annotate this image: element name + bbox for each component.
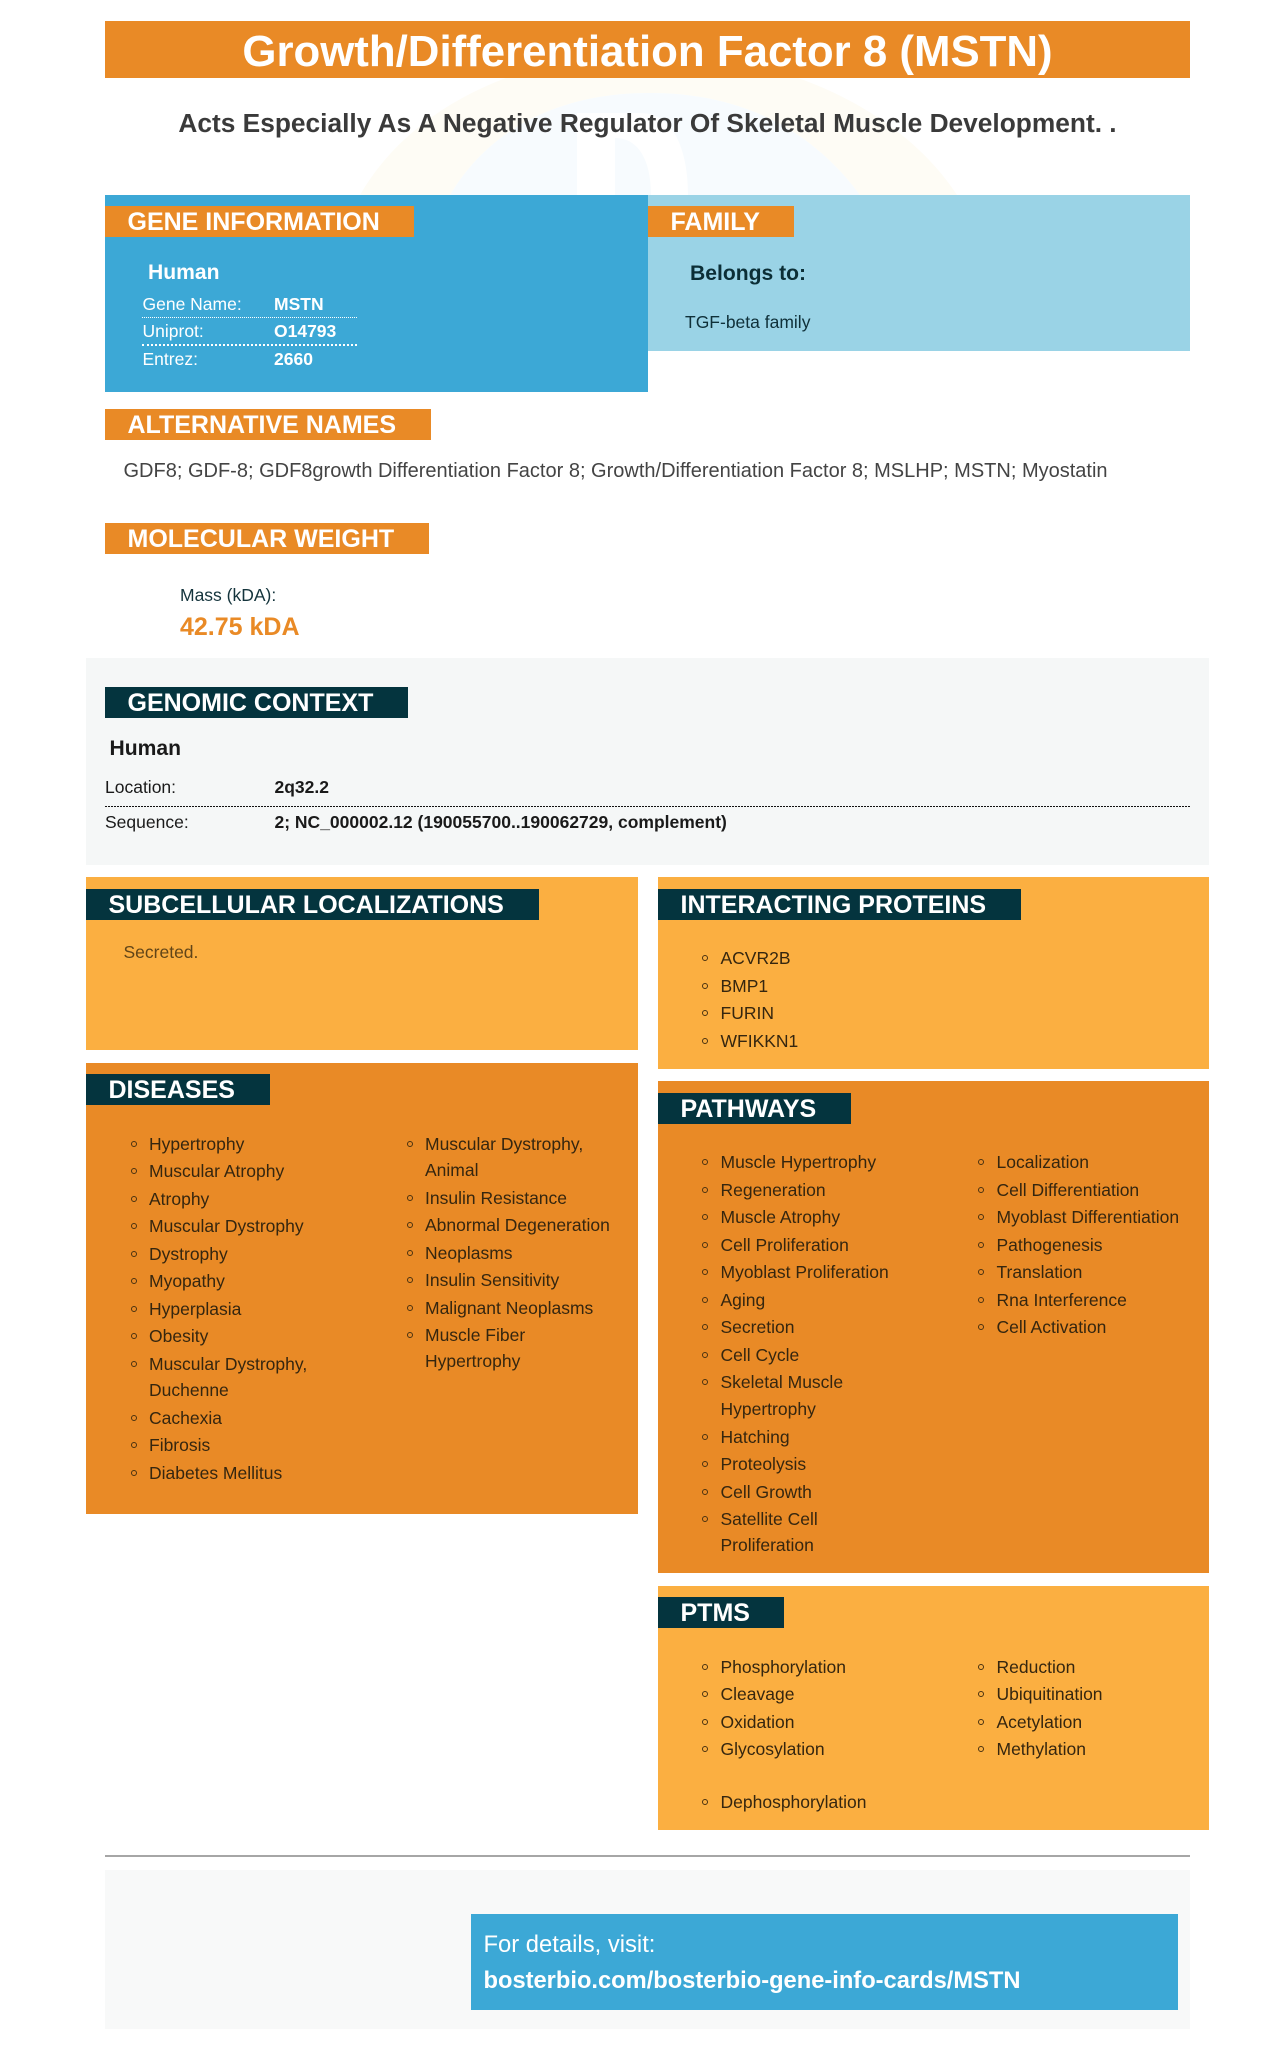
diseases list column 1: Hypertrophy xyxy=(149,1134,244,1154)
pathways list column 1 xyxy=(702,1152,889,1555)
pathways list column 1: Myoblast Proliferation xyxy=(720,1262,889,1282)
diseases list column 1: Obesity xyxy=(149,1326,208,1346)
diseases list column 2: Muscle Fiber xyxy=(425,1325,525,1345)
panel: subcellular localizations xyxy=(86,877,638,1050)
pathways list column 2: Myoblast Differentiation xyxy=(996,1207,1179,1227)
alternative names text: GDF8; GDF-8; GDF8growth Differentiation Factor 8; Growth/Differentiation Factor 8; MSLHP; MSTN; Myostatin xyxy=(124,460,1108,482)
ptms list column 2 xyxy=(978,1657,1103,1759)
heading: alternative names: ALTERNATIVE NAMES xyxy=(128,411,396,439)
diseases list column 2: Hypertrophy xyxy=(425,1351,520,1371)
ptms list column 2: Methylation xyxy=(996,1739,1086,1759)
pathways list column 1: Hypertrophy xyxy=(720,1399,816,1419)
diseases list column 1: Muscular Dystrophy xyxy=(149,1216,304,1236)
entrez row: Entrez: xyxy=(142,349,198,369)
pathways list column 2: Translation xyxy=(996,1262,1082,1282)
ptms list column 1: Phosphorylation xyxy=(720,1657,846,1677)
gene name row xyxy=(142,294,324,314)
panel: gene information xyxy=(105,195,648,392)
diseases list column 2: Abnormal Degeneration xyxy=(425,1215,610,1235)
diseases list column 1: Hyperplasia xyxy=(149,1299,241,1319)
pathways list column 1: Skeletal Muscle xyxy=(720,1372,843,1392)
species label: Human xyxy=(148,261,220,284)
title banner: Growth/Differentiation Factor 8 (MSTN) xyxy=(242,27,1053,76)
heading: ptms xyxy=(658,1597,784,1628)
ptms list column 2: Acetylation xyxy=(996,1712,1082,1732)
panel: family xyxy=(648,195,1190,351)
diseases list column 1: Diabetes Mellitus xyxy=(149,1463,282,1483)
subtitle: Acts Especially As A Negative Regulator Of Skeletal Muscle Development. . xyxy=(178,108,1117,138)
panel: diseases xyxy=(86,1063,638,1514)
entrez row: 2660 xyxy=(274,349,313,369)
diseases list column 2 xyxy=(407,1134,610,1371)
title banner xyxy=(105,21,1190,78)
gene name row: MSTN xyxy=(274,294,324,314)
location row: Location: xyxy=(105,777,176,797)
heading: molecular weight: MOLECULAR WEIGHT xyxy=(128,525,394,553)
heading: pathways: PATHWAYS xyxy=(680,1095,816,1123)
heading: ptms: PTMS xyxy=(680,1599,750,1627)
diseases list column 2: Insulin Resistance xyxy=(425,1188,567,1208)
interacting proteins list: ACVR2B xyxy=(720,948,791,968)
watermark logo xyxy=(360,78,956,195)
diseases list column 1: Myopathy xyxy=(149,1271,225,1291)
pathways list column 2: Rna Interference xyxy=(996,1290,1127,1310)
uniprot row: O14793 xyxy=(274,321,336,341)
diseases list column 2: Muscular Dystrophy, xyxy=(425,1134,583,1154)
family value: TGF-beta family xyxy=(685,312,810,332)
ptms list column 2: Ubiquitination xyxy=(996,1684,1103,1704)
pathways list column 1: Muscle Atrophy xyxy=(720,1207,840,1227)
pathways list column 1: Proliferation xyxy=(720,1535,814,1555)
heading: genomic context: GENOMIC CONTEXT xyxy=(128,689,373,717)
species label: Human xyxy=(110,737,181,760)
heading: diseases: DISEASES xyxy=(108,1076,235,1104)
ptms list column 1: Dephosphorylation xyxy=(720,1792,866,1812)
pathways list column 2 xyxy=(978,1152,1179,1337)
heading: diseases xyxy=(86,1074,270,1105)
heading: gene information: GENE INFORMATION xyxy=(128,208,380,236)
heading: interacting proteins: INTERACTING PROTEINS xyxy=(680,891,986,919)
gene name row: Gene Name: xyxy=(142,294,242,314)
pathways list column 2: Localization xyxy=(996,1152,1089,1172)
pathways list column 1: Muscle Hypertrophy xyxy=(720,1152,876,1172)
ptms list column 1: Cleavage xyxy=(720,1684,794,1704)
interacting proteins list: FURIN xyxy=(720,1003,774,1023)
pathways list column 1: Proteolysis xyxy=(720,1454,806,1474)
sequence row: 2; NC_000002.12 (190055700..190062729, complement) xyxy=(274,812,727,832)
heading: pathways xyxy=(658,1093,851,1124)
diseases list column 2: Malignant Neoplasms xyxy=(425,1298,593,1318)
diseases list column 1: Fibrosis xyxy=(149,1435,210,1455)
panel: footer xyxy=(105,1870,1190,2029)
diseases list column 1: Dystrophy xyxy=(149,1244,228,1264)
diseases list column 1 xyxy=(131,1134,307,1483)
pathways list column 1: Cell Cycle xyxy=(720,1345,799,1365)
callout url: bosterbio.com/bosterbio-gene-info-cards/MSTN xyxy=(484,1968,1020,1994)
pathways list column 2: Cell Differentiation xyxy=(996,1180,1139,1200)
sequence row: Sequence: xyxy=(105,812,189,832)
pathways list column 2: Pathogenesis xyxy=(996,1235,1103,1255)
pathways list column 1: Aging xyxy=(720,1290,765,1310)
pathways list column 1: Hatching xyxy=(720,1427,790,1447)
pathways list column 1: Cell Proliferation xyxy=(720,1235,849,1255)
pathways list column 1: Regeneration xyxy=(720,1180,826,1200)
mass value: 42.75 kDA xyxy=(180,613,300,641)
panel: ptms xyxy=(658,1586,1209,1830)
diseases list column 1: Atrophy xyxy=(149,1189,209,1209)
diseases list column 1: Muscular Atrophy xyxy=(149,1161,284,1181)
location row: 2q32.2 xyxy=(274,777,329,797)
uniprot row: Uniprot: xyxy=(142,321,204,341)
pathways list column 1: Cell Growth xyxy=(720,1482,812,1502)
ptms list column 1: Oxidation xyxy=(720,1712,794,1732)
callout label: For details, visit: xyxy=(484,1930,655,1958)
heading: family: FAMILY xyxy=(670,208,760,236)
uniprot row xyxy=(142,321,336,341)
interacting proteins list: BMP1 xyxy=(720,976,768,996)
diseases list column 2: Neoplasms xyxy=(425,1243,513,1263)
ptms list column 1: Glycosylation xyxy=(720,1739,825,1759)
mass label: Mass (kDA): xyxy=(180,585,276,605)
ptms list column 2: Reduction xyxy=(996,1657,1075,1677)
callout: details link xyxy=(471,1914,1178,2010)
pathways list column 1: Satellite Cell xyxy=(720,1509,818,1529)
pathways list column 1: Secretion xyxy=(720,1317,794,1337)
heading: subcellular localizations: SUBCELLULAR LOCALIZATIONS xyxy=(108,891,504,919)
ptms list column 1 xyxy=(702,1657,866,1812)
entrez row xyxy=(142,349,313,369)
diseases list column 1: Cachexia xyxy=(149,1408,222,1428)
belongs to label: Belongs to: xyxy=(690,262,806,285)
heading: family xyxy=(648,206,794,237)
panel: interacting proteins xyxy=(658,877,1209,1069)
diseases list column 2: Insulin Sensitivity xyxy=(425,1270,559,1290)
interacting proteins list: WFIKKN1 xyxy=(720,1031,798,1051)
localization text: Secreted. xyxy=(124,942,198,962)
pathways list column 2: Cell Activation xyxy=(996,1317,1106,1337)
diseases list column 1: Duchenne xyxy=(149,1380,229,1400)
interacting proteins list xyxy=(702,948,798,1051)
diseases list column 1: Muscular Dystrophy, xyxy=(149,1354,307,1374)
panel: genomic context xyxy=(86,658,1209,865)
diseases list column 2: Animal xyxy=(425,1160,478,1180)
panel: pathways xyxy=(658,1081,1209,1573)
location row xyxy=(105,777,329,797)
